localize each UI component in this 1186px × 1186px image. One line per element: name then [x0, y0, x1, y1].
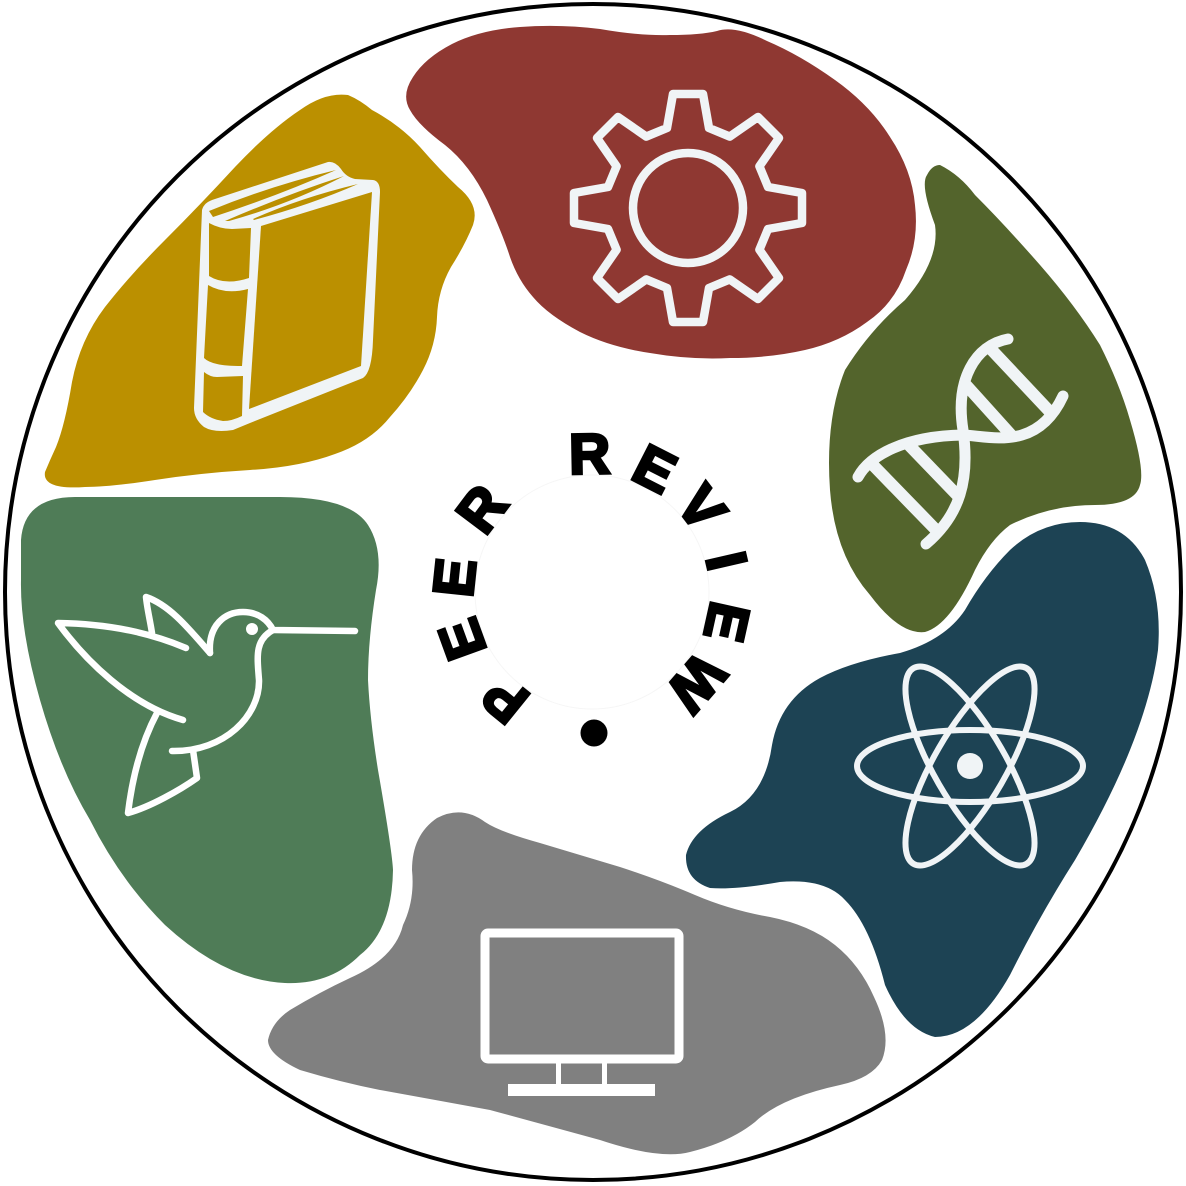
curved label: PEER REVIEW: P	[471, 662, 540, 736]
curved label: PEER REVIEW: W	[654, 641, 738, 724]
curved label: PEER REVIEW: R	[568, 422, 611, 487]
olive blob	[829, 165, 1141, 632]
icon: book	[194, 162, 380, 431]
separator dot	[580, 720, 608, 746]
icon: atom	[857, 650, 1083, 882]
panel: biology	[21, 497, 393, 983]
gold blob	[45, 95, 475, 487]
panel: humanities	[45, 95, 475, 487]
icon: hummingbird	[58, 597, 355, 813]
inner circle	[475, 475, 709, 709]
curved label: PEER REVIEW: E	[421, 555, 489, 600]
navy blob	[686, 522, 1159, 1037]
curved label: PEER REVIEW: R	[444, 474, 520, 545]
red blob	[406, 26, 916, 358]
icon: dna helix	[858, 339, 1063, 544]
panel: physical sciences	[686, 522, 1159, 1037]
panel: life sciences	[829, 165, 1141, 632]
panel: computing	[268, 812, 886, 1154]
icon: monitor	[485, 933, 679, 1096]
curved label: PEER REVIEW: I	[693, 546, 759, 576]
icon: gear	[574, 94, 802, 322]
curved label: PEER REVIEW	[421, 422, 762, 736]
curved label: PEER REVIEW: E	[623, 432, 686, 507]
center: peer review ring	[421, 422, 762, 746]
green blob	[21, 497, 393, 983]
curved label: PEER REVIEW: E	[426, 610, 499, 668]
grey blob	[268, 812, 886, 1154]
curved label: PEER REVIEW: E	[691, 596, 762, 647]
panel: engineering	[406, 26, 916, 358]
curved label: PEER REVIEW: V	[664, 474, 738, 543]
